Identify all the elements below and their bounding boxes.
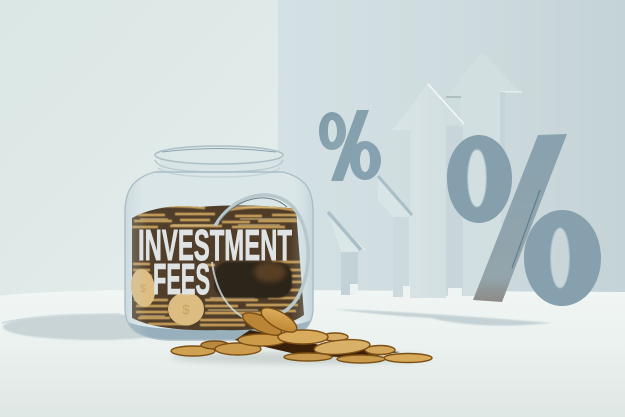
- label: INVESTMENT: INVESTMENT: [138, 221, 292, 270]
- icon: large percent sign: [447, 134, 601, 306]
- background: floor: [0, 290, 625, 417]
- jar body glass: [125, 172, 313, 340]
- percent upper ring: [447, 135, 512, 223]
- text: jar label: FEES: [153, 255, 210, 304]
- coin: face front: $: [182, 302, 190, 317]
- dark coin shadow: [214, 262, 292, 298]
- coins spilled on floor: [170, 303, 432, 364]
- arrow: third: [378, 176, 412, 297]
- arrow: smallest: [328, 212, 366, 295]
- jar base: [128, 320, 311, 340]
- floor shadows: [2, 309, 552, 340]
- jar: [125, 146, 313, 340]
- coin: face left: [128, 268, 158, 308]
- background: left wall: [0, 0, 278, 295]
- jar outline: [125, 172, 313, 340]
- percent lower ring: [524, 210, 601, 306]
- coin: floor stack: [171, 303, 432, 363]
- text: jar label: [138, 221, 292, 304]
- coin: face left: $: [140, 283, 146, 295]
- arrow: second: [393, 83, 465, 298]
- jar mouth ring: [215, 195, 308, 318]
- percent slash: [473, 134, 567, 302]
- arrow: tallest rear: [446, 52, 522, 296]
- coin: face front: [168, 292, 204, 326]
- dark gaps between coins: [235, 330, 400, 358]
- icon: small percent sign: [319, 110, 381, 181]
- jar neck: [155, 146, 283, 177]
- coins inside jar: [130, 203, 308, 333]
- background: right wall: [278, 0, 625, 295]
- arrows: pale glass arrows rising behind the percent signs: [328, 52, 522, 298]
